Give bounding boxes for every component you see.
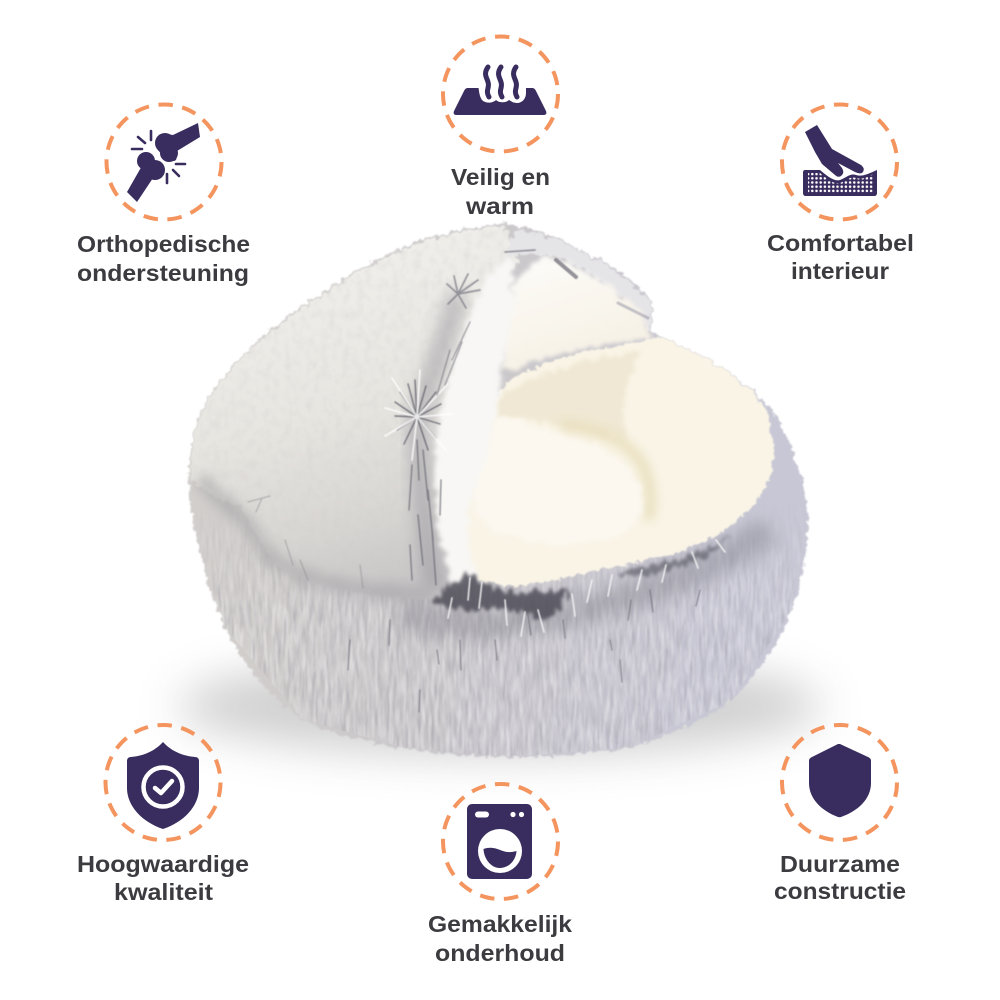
- icon: plain shield: [809, 744, 871, 817]
- label: constructie: [774, 878, 906, 904]
- feature: gemakkelijk onderhoud: [428, 784, 572, 966]
- label: [77, 231, 250, 286]
- label: Hoogwaardige: [77, 851, 249, 877]
- dark tip on hood: [556, 260, 576, 277]
- grey shading along hood seam: [417, 294, 458, 590]
- bed opening rim cream: [445, 337, 774, 586]
- product photo: round plush cat bed with hood: [180, 224, 820, 760]
- label: ondersteuning: [77, 260, 249, 286]
- label: [774, 851, 906, 904]
- inner cushion: [473, 418, 643, 544]
- cushion crease shadow: [560, 425, 651, 520]
- hood white fur edge: [435, 260, 514, 588]
- dashed ring: [106, 104, 222, 220]
- label: [767, 230, 914, 284]
- hood grey-tipped top edge: [505, 230, 651, 332]
- dark fur band below rim: [432, 574, 566, 619]
- hood fur grain: [465, 254, 468, 258]
- feature: hoogwaardige kwaliteit: [77, 725, 249, 905]
- fur tufts and strands: [248, 250, 725, 712]
- seam tuft at hood centre: [395, 380, 441, 450]
- grey shading under the rim: [400, 530, 770, 623]
- hood lining: [502, 256, 650, 372]
- seam down from tuft: [409, 440, 441, 585]
- dashed ring: [782, 725, 897, 840]
- label: Comfortabel: [767, 230, 914, 256]
- feature: comfortabel interieur: [767, 104, 914, 284]
- icon: heated mat: [454, 67, 546, 115]
- feature: duurzame constructie: [774, 725, 906, 904]
- label: [451, 164, 550, 219]
- label: interieur: [791, 258, 889, 284]
- label: Duurzame: [780, 851, 900, 877]
- icon: joint bones: [127, 123, 200, 202]
- feature: veilig en warm: [443, 36, 558, 219]
- grey shading along hood lower edge: [200, 480, 430, 596]
- dashed ring: [443, 784, 558, 899]
- dashed ring: [106, 725, 220, 840]
- label: [77, 851, 249, 905]
- feature: orthopedische ondersteuning: [77, 104, 250, 286]
- label: onderhoud: [435, 940, 565, 966]
- label: warm: [465, 193, 534, 219]
- hood exterior: [190, 226, 520, 600]
- body strands: [348, 590, 700, 712]
- label: Orthopedische: [77, 231, 250, 257]
- bed outer body: [188, 224, 808, 757]
- dashed ring: [782, 104, 897, 220]
- white strands at rim: [448, 540, 725, 636]
- label: [428, 911, 572, 966]
- icon: shield with check: [127, 742, 199, 829]
- icon: washing machine: [467, 804, 532, 879]
- hood side strands: [248, 496, 363, 588]
- icon: hand pressing foam: [803, 125, 877, 196]
- fur streak texture: [214, 558, 792, 757]
- dark fur band right: [620, 536, 730, 579]
- white strands around tuft: [385, 370, 452, 460]
- interior back wall: [495, 352, 640, 440]
- dashed ring: [443, 36, 558, 152]
- label: Veilig en: [451, 164, 550, 190]
- top tuft: [447, 250, 535, 308]
- drop shadow under bed: [178, 656, 822, 756]
- seam up towards top tuft: [437, 322, 470, 395]
- label: kwaliteit: [114, 879, 213, 905]
- label: Gemakkelijk: [428, 911, 572, 937]
